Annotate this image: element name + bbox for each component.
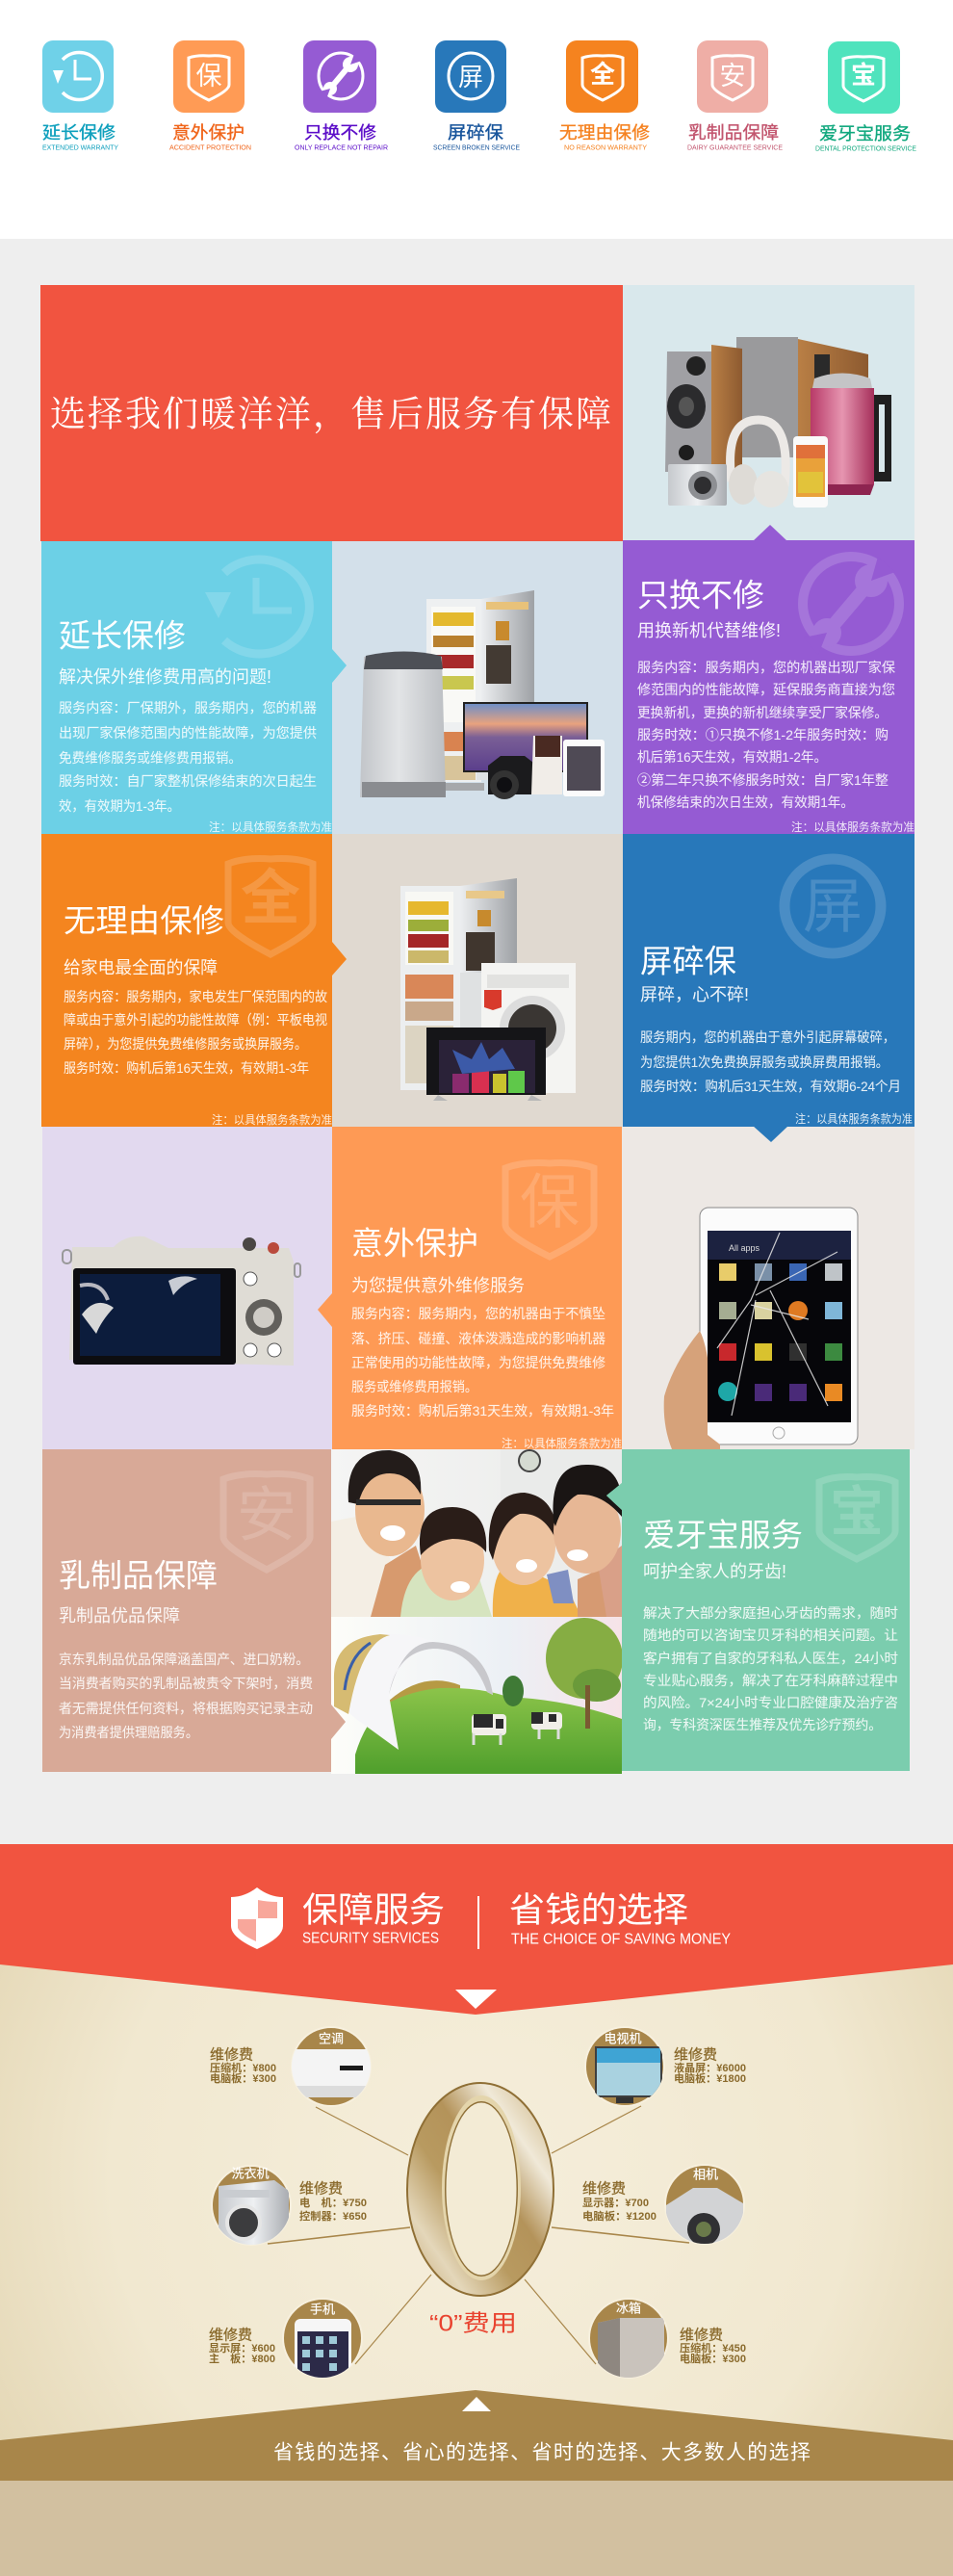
label: only replace: ONLY REPLACE NOT REPAIR	[295, 143, 389, 152]
panel: main title	[40, 285, 623, 541]
service icon row	[42, 40, 916, 152]
product: white speaker	[531, 736, 562, 794]
watermark icon: shield 保: 保	[520, 1169, 580, 1236]
circle: washing machine	[212, 2166, 291, 2249]
watermark icon: clock	[205, 559, 309, 654]
product: front-load washer	[481, 963, 576, 1093]
label: accident protection: 意外保护	[172, 123, 245, 143]
body text: 服务内容：厂保期外，服务期内，您的机器	[59, 700, 317, 716]
product: DSLR camera	[488, 756, 537, 799]
icon: extended warranty	[42, 40, 114, 113]
body text: 障或由于意外引起的功能性故障（例：平板电视	[64, 1012, 327, 1028]
callout: zero fee: “0”费用	[429, 2311, 517, 2336]
product: camera back	[63, 1236, 300, 1366]
watermark icon: shield 全: 全	[241, 865, 300, 932]
body text: 服务时效：购机后31天生效，有效期6-24个月	[640, 1079, 901, 1094]
body text: 免费维修服务或维修费用报销。	[59, 750, 242, 766]
label: accident protection	[169, 123, 251, 152]
panel: accident protection	[318, 1127, 622, 1450]
body text	[59, 1652, 313, 1740]
big zero	[406, 2082, 554, 2297]
body text: 京东乳制品优品保障涵盖国产、进口奶粉。	[59, 1652, 309, 1667]
circle: mobile phone: 手机	[310, 2302, 335, 2317]
circle: air conditioner	[292, 2027, 371, 2106]
label: air conditioner cost: 压缩机：¥800	[210, 2061, 276, 2074]
body text: 解决了大部分家庭担心牙齿的需求，随时	[643, 1605, 898, 1621]
product: tablet with cracked screen	[700, 1208, 858, 1444]
panel: extended warranty	[41, 541, 332, 834]
body text: 当消费者购买的乳制品被责令下架时，消费	[59, 1676, 313, 1691]
panel: mirrorless camera photo	[42, 1127, 332, 1449]
body text: 服务内容：服务期内，家电发生厂保范围内的故	[64, 989, 327, 1004]
body text: 客户拥有了自家的牙科私人医生，24小时	[643, 1651, 898, 1666]
label: extended warranty: 延长保修	[42, 123, 116, 143]
label: dental protection: 爱牙宝服务	[819, 124, 911, 143]
heading: 爱牙宝服务	[643, 1518, 803, 1552]
heading: security services: 保障服务	[302, 1889, 445, 1930]
heading: security services	[302, 1889, 445, 1947]
label: camera cost: 维修费	[582, 2180, 626, 2198]
label: screen broken: SCREEN BROKEN SERVICE	[433, 143, 520, 152]
body text: 为消费者提供理赔服务。	[59, 1725, 198, 1740]
watermark icon: shield 全	[228, 859, 313, 954]
body text: 服务内容：服务期内，您的机器由于不慎坠	[351, 1306, 605, 1321]
panel: only replace	[623, 525, 914, 834]
body text	[64, 989, 327, 1076]
label: screen broken	[433, 123, 520, 152]
label: air conditioner cost: 维修费	[210, 2047, 253, 2063]
photo: smiling family	[331, 1449, 622, 1617]
subheading: 呵护全家人的牙齿!	[643, 1562, 786, 1581]
footnote: 注：以具体服务条款为准	[791, 820, 914, 834]
watermark icon: shield 保	[505, 1163, 594, 1257]
footnote: 注：以具体服务条款为准	[502, 1436, 622, 1450]
label: washing machine cost: 控制器：¥650	[299, 2209, 367, 2223]
watermark icon: shield 宝	[819, 1477, 895, 1559]
label: extended warranty	[42, 123, 118, 152]
subheading: 给家电最全面的保障	[64, 958, 218, 977]
product: headphones	[729, 420, 788, 507]
icon: screen broken: 屏	[458, 63, 483, 91]
subheading: 解决保外维修费用高的问题!	[59, 667, 271, 687]
watermark icon: shield 安: 安	[237, 1483, 296, 1548]
label: television cost: 电脑板：¥1800	[674, 2071, 746, 2085]
watermark icon: wrench	[803, 557, 899, 655]
circle: air conditioner: 空调	[319, 2032, 344, 2045]
heading: saving choice: 省钱的选择	[509, 1889, 688, 1930]
label: screen broken: 屏碎保	[448, 123, 503, 143]
connector lines	[268, 2106, 689, 2364]
arrow: down pointer	[753, 1126, 788, 1142]
product: flat TV	[463, 702, 588, 772]
label: dental protection: DENTAL PROTECTION SERVICE	[815, 144, 916, 152]
circle: television: 电视机	[604, 2032, 642, 2045]
icon: only replace	[303, 40, 376, 113]
body text: 修范围内的性能故障，延保服务商直接为您	[637, 682, 895, 697]
label: washing machine cost	[299, 2180, 367, 2223]
body text: 服务期内，您的机器由于意外引起屏幕破碎，	[640, 1029, 895, 1045]
body text: 服务时效：购机后第16天生效，有效期1-3年	[64, 1060, 309, 1076]
subheading: 为您提供意外维修服务	[351, 1276, 525, 1295]
label: refrigerator cost: 维修费	[680, 2327, 723, 2344]
body text: 服务或维修费用报销。	[351, 1379, 477, 1394]
body text	[637, 660, 895, 810]
arrow: white up triangle	[462, 2397, 491, 2411]
body text: 机后第16天生效，有效期1-2年。	[637, 749, 827, 765]
circle: mobile phone	[283, 2299, 362, 2386]
heading: saving choice	[509, 1889, 731, 1947]
panel: product group photo	[623, 285, 914, 541]
label: camera cost: 电脑板：¥1200	[582, 2209, 657, 2223]
label: mobile phone cost	[209, 2327, 275, 2365]
label: washing machine cost: 维修费	[299, 2180, 343, 2198]
section: page bottom strip	[0, 2481, 953, 2576]
section: gold footer band	[0, 2390, 953, 2481]
heading: 屏碎保	[640, 944, 736, 978]
panel: appliances photo 2	[332, 834, 623, 1127]
page background: grey panel area	[0, 239, 953, 1844]
arrow: up pointer	[753, 525, 787, 541]
body text: 者无需提供任何资料，将根据购买记录主动	[59, 1701, 313, 1716]
label: television cost	[674, 2047, 746, 2085]
label: mobile phone cost: 主 板：¥800	[209, 2352, 275, 2365]
heading: saving choice: THE CHOICE OF SAVING MONEY	[511, 1932, 731, 1947]
heading: 乳制品保障	[59, 1558, 218, 1593]
panel: broken tablet photo	[622, 1126, 914, 1449]
arrow: left pointer	[318, 1293, 332, 1327]
heading: 无理由保修	[64, 903, 224, 938]
panel: no reason warranty	[41, 834, 332, 1127]
body text: 屏碎），为您提供免费维修服务或换屏服务。	[64, 1036, 307, 1052]
body text: 服务时效：自厂家整机保修结束的次日起生	[59, 773, 317, 789]
label: only replace: 只换不修	[304, 123, 376, 143]
body text: 为您提供1次免费换屏服务或换屏费用报销。	[640, 1054, 889, 1070]
icon: security shield	[231, 1887, 283, 1949]
label: no reason warranty	[559, 123, 650, 152]
body text: 专业贴心服务，解决了在牙科麻醉过程中	[643, 1673, 898, 1688]
footnote: 注：以具体服务条款为准	[209, 820, 332, 834]
heading: main title: 选择我们暖洋洋，售后服务有保障	[50, 395, 611, 435]
circle: refrigerator: 冰箱	[616, 2302, 641, 2315]
body text: 服务内容：服务期内，您的机器出现厂家保	[637, 660, 895, 675]
heading: extended warranty: 延长保修	[59, 618, 186, 653]
panel: screen broken	[623, 834, 914, 1127]
label: accident protection: ACCIDENT PROTECTION	[169, 143, 251, 152]
body text: 的风险。7×24小时专业口腔健康及治疗咨	[643, 1695, 898, 1710]
body text	[351, 1306, 614, 1418]
label: mobile phone cost: 维修费	[209, 2327, 252, 2344]
label: dairy guarantee: DAIRY GUARANTEE SERVICE	[687, 143, 783, 152]
product: tablet with cracked screen: All apps	[729, 1243, 760, 1253]
label: only replace	[295, 123, 389, 152]
arrow: white down triangle	[455, 1990, 497, 2009]
product: tall fridge	[400, 878, 517, 1090]
body text: 效，有效期为1-3年。	[59, 798, 180, 814]
label: camera cost: 显示器：¥700	[582, 2197, 649, 2209]
body text: 正常使用的功能性故障，为您提供免费维修	[351, 1355, 605, 1370]
product: rear speaker	[736, 337, 868, 491]
product: smartphone	[793, 436, 828, 507]
body text	[640, 1029, 901, 1094]
section: red header band	[0, 1844, 953, 2015]
photo: milk can on green hill	[331, 1617, 623, 1774]
subheading: 用换新机代替维修!	[637, 621, 781, 640]
subheading: 乳制品优品保障	[59, 1606, 180, 1626]
product: open fridge	[426, 590, 534, 791]
arrow: left pointer	[606, 1483, 622, 1510]
circle: camera: 相机	[693, 2167, 718, 2182]
product: compact camera	[668, 464, 727, 506]
body text: 落、挤压、碰撞、液体泼溅造成的影响机器	[351, 1331, 605, 1346]
arrow: right pointer	[332, 942, 347, 976]
panel: appliances photo	[332, 541, 623, 834]
heading: 意外保护	[351, 1225, 478, 1262]
section: savings background	[0, 1955, 953, 2481]
label: refrigerator cost	[680, 2327, 746, 2365]
panel: dental protection	[606, 1449, 910, 1771]
label: dairy guarantee: 乳制品保障	[688, 123, 779, 143]
hand holding tablet	[664, 1331, 720, 1449]
product: washing machine	[360, 651, 446, 797]
label: mobile phone cost: 显示屏：¥600	[209, 2342, 275, 2355]
icon: dental protection	[828, 41, 900, 114]
label: camera cost	[582, 2180, 657, 2223]
body text: 询，专科资深医生推荐及优先诊疗预约。	[643, 1717, 882, 1732]
label: television cost: 液晶屏：¥6000	[674, 2061, 746, 2074]
label: air conditioner cost: 电脑板：¥300	[210, 2071, 276, 2085]
product: front speaker	[665, 345, 742, 474]
icon: screen broken	[435, 40, 506, 113]
body text: 服务时效：①只换不修1-2年服务时效：购	[637, 727, 889, 742]
body text: ②第二年只换不修服务时效：自厂家1年整	[637, 772, 889, 788]
icon: accident protection: 保	[196, 62, 221, 91]
icon: no reason warranty: 全	[590, 60, 615, 89]
circle: washing machine: 洗衣机	[231, 2167, 270, 2180]
circle: camera	[665, 2165, 744, 2246]
footnote: 注：以具体服务条款为准	[795, 1111, 913, 1126]
watermark icon: shield 宝: 宝	[830, 1481, 884, 1543]
label: dairy guarantee	[687, 123, 783, 152]
watermark icon: circle 屏	[785, 859, 881, 953]
label: no reason warranty: 无理由保修	[559, 123, 650, 143]
panel: dairy guarantee	[42, 1449, 331, 1772]
subheading: 屏碎，心不碎!	[640, 985, 749, 1004]
label: refrigerator cost: 电脑板：¥300	[680, 2352, 746, 2365]
body text	[59, 700, 317, 814]
product: TV with splash	[426, 1028, 546, 1101]
circle: refrigerator	[589, 2299, 668, 2383]
product: tablet	[563, 740, 605, 796]
product: soymilk maker	[811, 374, 891, 495]
icon: accident protection	[173, 40, 245, 113]
body text: 随地的可以咨询宝贝牙科的相关问题。让	[643, 1627, 898, 1643]
arrow: right pointer	[332, 649, 347, 683]
icon: dairy guarantee	[697, 40, 768, 113]
tagline: 省钱的选择、省心的选择、省时的选择、大多数人的选择	[273, 2442, 811, 2463]
label: washing machine cost: 电 机：¥750	[299, 2196, 367, 2209]
watermark icon: shield 安	[223, 1474, 310, 1570]
label: television cost: 维修费	[674, 2047, 717, 2063]
circle: television	[585, 2027, 664, 2106]
icon: no reason warranty	[566, 40, 638, 113]
heading: only replace: 只换不修	[637, 578, 764, 612]
label: refrigerator cost: 压缩机：¥450	[680, 2341, 746, 2355]
heading: security services: SECURITY SERVICES	[302, 1930, 439, 1947]
body text: 机保修结束的次日生效，有效期1年。	[637, 794, 854, 810]
label: no reason warranty: NO REASON WARRANTY	[564, 143, 647, 152]
body text: 服务时效：购机后第31天生效，有效期1-3年	[351, 1403, 614, 1418]
icon: dental protection: 宝	[851, 61, 876, 90]
label: extended warranty: EXTENDED WARRANTY	[42, 143, 118, 152]
footnote: 注：以具体服务条款为准	[212, 1112, 332, 1127]
watermark icon: circle 屏: 屏	[803, 874, 863, 940]
icon: dairy guarantee: 安	[720, 62, 745, 91]
page background: white header	[0, 0, 953, 239]
body text: 更换新机，更换的新机继续享受厂家保修。	[637, 705, 888, 720]
label: dental protection	[815, 124, 916, 152]
body text	[643, 1605, 898, 1732]
body text: 出现厂家保修范围内的性能故障，为您提供	[59, 725, 317, 741]
label: air conditioner cost	[210, 2047, 276, 2085]
